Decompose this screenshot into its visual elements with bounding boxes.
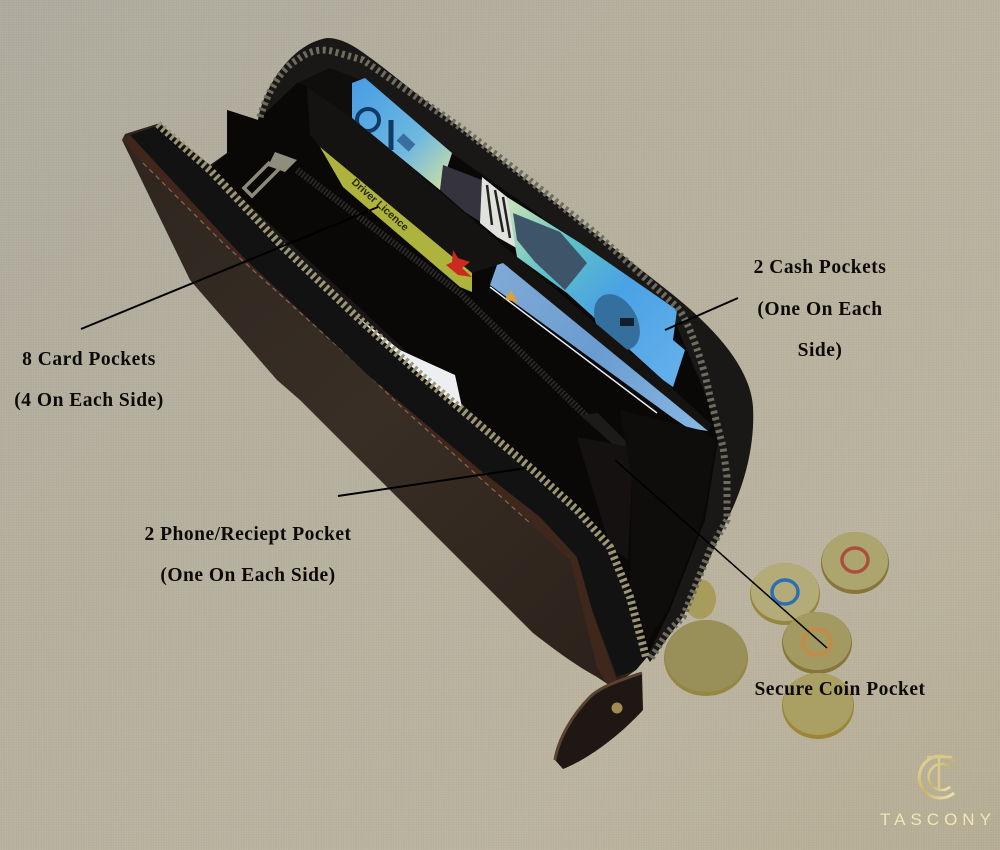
- hologram strip: [440, 165, 482, 223]
- label: cash pockets: [754, 257, 886, 361]
- receipt: [355, 315, 462, 407]
- label: cash pockets: (One On Each: [757, 299, 883, 320]
- card text: Driver Licence: [349, 176, 411, 234]
- divider band: [307, 87, 712, 432]
- logo: Tascony: [880, 756, 996, 829]
- inner pocket zipper: [297, 170, 587, 417]
- label: card pockets: 8 Card Pockets: [22, 349, 156, 370]
- banknote window: [585, 286, 649, 358]
- label: cash pockets: Side): [798, 340, 842, 361]
- front zipper teeth: [158, 124, 646, 657]
- white feather section: [480, 177, 520, 250]
- metal zipper pull: [244, 152, 297, 196]
- gold triangle on card: [505, 290, 518, 303]
- coins: [664, 532, 889, 739]
- label: card pockets: (4 On Each Side): [14, 390, 164, 411]
- back shell with zipper tape: [160, 38, 753, 662]
- callout line: cash pockets: [665, 298, 738, 330]
- card bottom edge: [490, 287, 657, 413]
- label: phone receipt pocket: [144, 524, 352, 586]
- blue bank card: [490, 263, 708, 431]
- logo: Tascony: TASCONY: [880, 810, 996, 829]
- icon: leather zipper tab: [555, 673, 643, 769]
- front leather panel: [122, 123, 647, 687]
- stitching: [143, 163, 530, 523]
- callout line: card pockets: [81, 207, 378, 329]
- wallet: [122, 38, 753, 687]
- banknote portrait: [513, 213, 587, 290]
- upper slot shadow: [297, 68, 367, 118]
- callout line: phone pocket: [338, 468, 527, 496]
- main banknote: [507, 197, 685, 387]
- brown leather band: [122, 134, 617, 683]
- label: coin pocket: Secure Coin Pocket: [754, 679, 926, 700]
- label: cash pockets: 2 Cash Pockets: [754, 257, 886, 278]
- red leaf logo: [446, 250, 472, 277]
- zipper tape: [130, 125, 647, 677]
- right pocket flap: [620, 410, 716, 640]
- zipper end stop: [580, 413, 632, 455]
- back zipper teeth: [260, 50, 727, 660]
- centre pocket flap: [577, 437, 632, 560]
- label: phone receipt pocket: 2 Phone/Reciept Pocket: [144, 524, 352, 545]
- callout line: coin pocket: [615, 460, 827, 648]
- inner well: [210, 68, 718, 657]
- yellow driver licence card: [320, 147, 472, 292]
- note icon: [357, 109, 412, 150]
- back banknote: [352, 78, 452, 190]
- label: phone receipt pocket: (One On Each Side): [160, 565, 336, 586]
- label: card pockets: [14, 349, 164, 411]
